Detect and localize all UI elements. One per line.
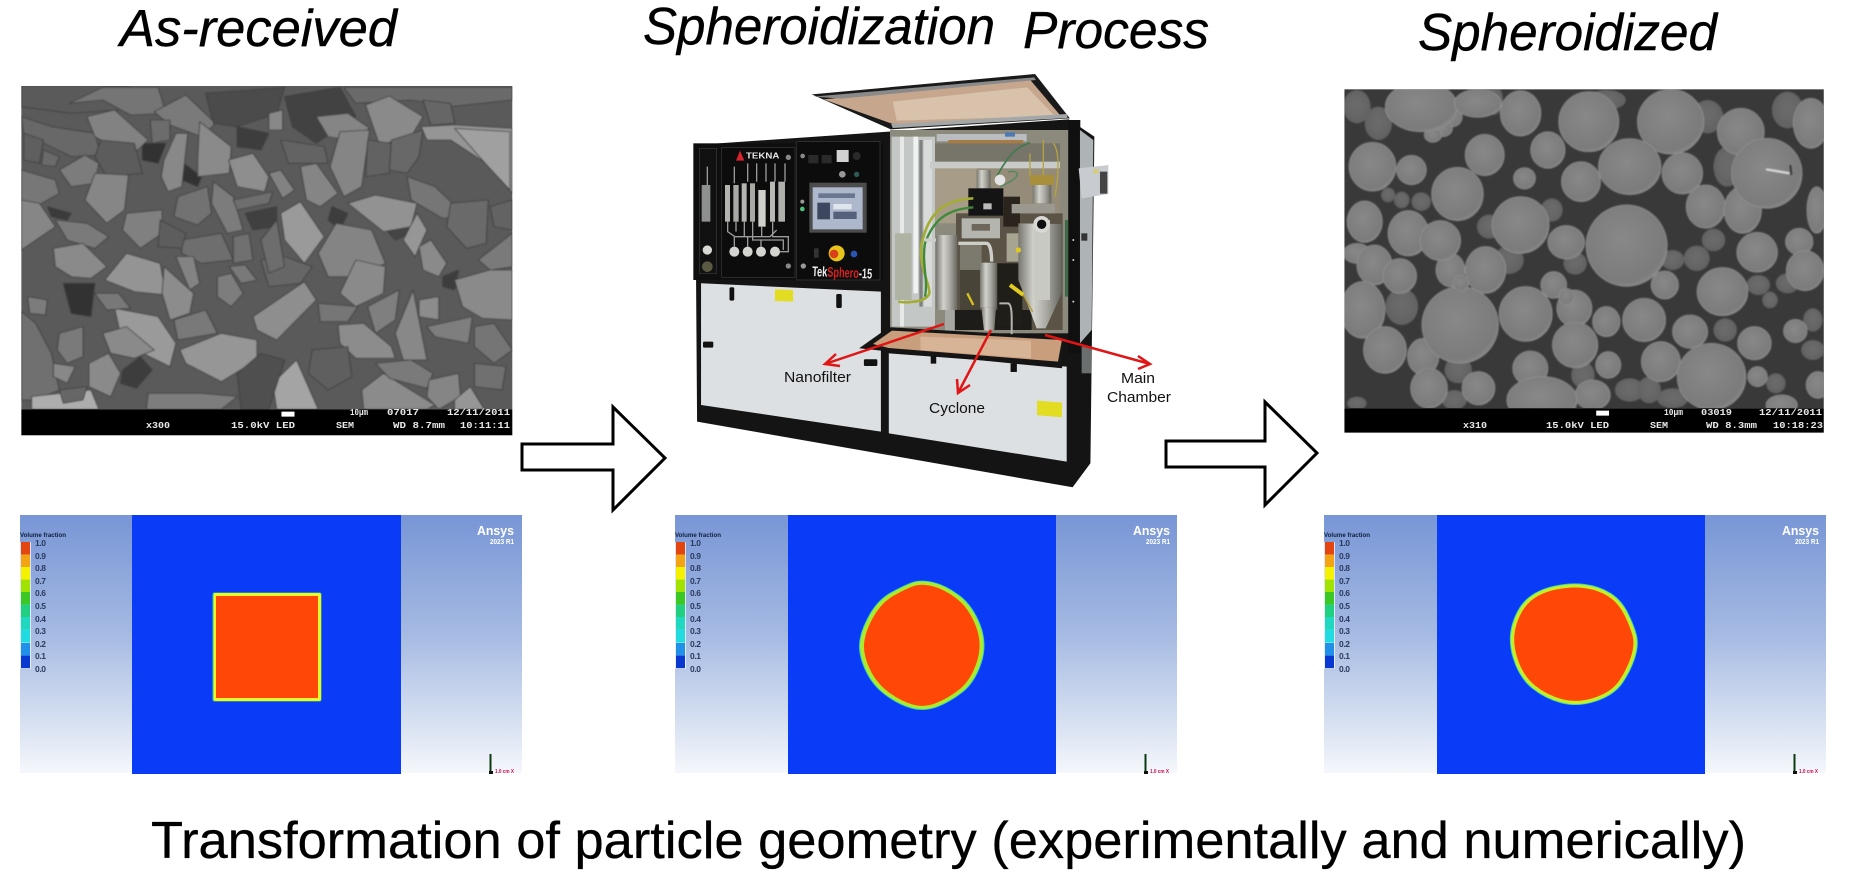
label: Main Chamber: Main [1121, 370, 1155, 387]
panel: as-received SEM micrograph: 10:11:11 [460, 421, 511, 431]
panel: spheroidized SEM micrograph: 10μm [1664, 408, 1684, 418]
heading: Spheroidization Process: Process [1023, 2, 1209, 60]
machine model name: TekSphero-15 [812, 263, 873, 282]
blue domain [1437, 515, 1705, 774]
colour legend: 0.9 [1339, 551, 1350, 561]
colour legend: 0.7 [1339, 576, 1350, 586]
lower left white panel [701, 283, 881, 432]
particle: irregular round [862, 583, 982, 707]
lower right white panel [889, 353, 1067, 462]
panel: as-received SEM micrograph [21, 86, 512, 435]
colour legend: 0.6 [690, 588, 701, 598]
axis triad: 1.0 cm X [495, 769, 515, 775]
blue domain [132, 515, 401, 774]
panel: as-received SEM micrograph: 12/11/2011 [447, 408, 511, 418]
arrow: process to spheroidized [1166, 402, 1317, 505]
panel: spheroidized SEM micrograph: SEM [1650, 421, 1668, 431]
red arrow to cyclone [957, 330, 991, 393]
colour legend: 0.9 [35, 551, 46, 561]
colour legend: 0.1 [690, 651, 701, 661]
heading: Spheroidized: Spheroidized [1418, 4, 1719, 62]
colour legend: 0.8 [35, 563, 46, 573]
colour legend: 0.6 [35, 588, 46, 598]
colour legend: 0.8 [1339, 563, 1350, 573]
label: Cyclone: Cyclone [929, 400, 985, 417]
software logo: Ansys [1782, 523, 1819, 538]
panel: CFD simulation, spheroidized particle [1324, 515, 1826, 775]
copper door shelf [859, 327, 1067, 368]
colour legend: Volume fraction [1324, 533, 1370, 539]
software logo: 2023 R1 [1146, 539, 1170, 546]
colour legend: 0.3 [1339, 626, 1350, 636]
software logo [1133, 523, 1170, 546]
simulation background [675, 515, 1177, 773]
panel: spheroidized SEM micrograph: WD 8.3mm [1706, 421, 1758, 431]
axis triad [1144, 754, 1170, 775]
panel: spheroidized SEM micrograph [1341, 82, 1830, 433]
particle: near circular [1512, 586, 1635, 703]
panel: spheroidized SEM micrograph: 12/11/2011 [1759, 408, 1823, 418]
panel: as-received SEM micrograph: 07017 [387, 408, 419, 418]
colour legend: 1.0 [35, 538, 46, 548]
machine lid [812, 74, 1070, 129]
panel: spheroidized SEM micrograph: 10:18:23 [1773, 421, 1823, 431]
colour legend: 0.3 [35, 626, 46, 636]
panel: TekSphero-15 machine photograph [693, 74, 1171, 487]
machine body [695, 119, 1094, 487]
heading: As-received: As-received [117, 0, 399, 58]
panel: as-received SEM micrograph: WD 8.7mm [393, 421, 446, 431]
colour legend: 1.0 [690, 538, 701, 548]
label: Main Chamber: Chamber [1107, 389, 1171, 406]
colour legend: 0.2 [35, 639, 46, 649]
panel: as-received SEM micrograph: SEM [336, 421, 354, 431]
panel: as-received SEM micrograph: 10μm [350, 408, 368, 418]
colour legend: 0.0 [1339, 664, 1350, 674]
colour legend: 0.9 [690, 551, 701, 561]
control panels: TEKNA [746, 150, 779, 160]
colour legend: 0.7 [35, 576, 46, 586]
software logo: 2023 R1 [1795, 539, 1819, 546]
colour legend: 0.5 [1339, 601, 1350, 611]
colour legend: 0.2 [1339, 639, 1350, 649]
colour legend [675, 533, 721, 674]
colour legend: 0.1 [1339, 651, 1350, 661]
arrow: as-received to process [522, 407, 665, 510]
colour legend [20, 533, 66, 674]
caption: Transformation of particle geometry (experimentally and numerically) [151, 812, 1746, 870]
axis triad: 1.0 cm X [1150, 769, 1170, 775]
simulation background [20, 515, 522, 773]
colour legend: 0.0 [690, 664, 701, 674]
colour legend: 0.4 [35, 614, 46, 624]
colour legend: Volume fraction [675, 533, 721, 539]
colour legend: 0.8 [690, 563, 701, 573]
panel: CFD simulation, square particle [20, 515, 522, 775]
colour legend: 0.1 [35, 651, 46, 661]
panel: as-received SEM micrograph: x300 [146, 421, 170, 431]
simulation background [1324, 515, 1826, 773]
axis triad [1793, 754, 1819, 775]
colour legend: 0.7 [690, 576, 701, 586]
colour legend: 0.4 [690, 614, 701, 624]
machine interior [890, 120, 1108, 373]
particle: square [212, 592, 322, 702]
colour legend: 0.3 [690, 626, 701, 636]
label: Main Chamber [1107, 370, 1171, 406]
axis triad [489, 754, 515, 775]
colour legend: 0.2 [690, 639, 701, 649]
blue domain [788, 515, 1056, 774]
panel: as-received SEM micrograph: 15.0kV LED [231, 421, 296, 431]
control panels [693, 142, 883, 280]
colour legend: 1.0 [1339, 538, 1350, 548]
axis triad: 1.0 cm X [1799, 769, 1819, 775]
label: Nanofilter: Nanofilter [784, 369, 851, 386]
colour legend: 0.5 [35, 601, 46, 611]
software logo [1782, 523, 1819, 546]
software logo: 2023 R1 [490, 539, 514, 546]
panel: spheroidized SEM micrograph: x310 [1463, 421, 1487, 431]
colour legend [1324, 533, 1370, 674]
colour legend: 0.6 [1339, 588, 1350, 598]
red arrow to nanofilter [825, 324, 944, 366]
software logo [477, 523, 514, 546]
colour legend: Volume fraction [20, 533, 66, 539]
red arrow to main chamber [1045, 335, 1150, 369]
software logo: Ansys [1133, 523, 1170, 538]
panel: CFD simulation, rounding particle [675, 515, 1177, 775]
panel: spheroidized SEM micrograph: 03019 [1701, 408, 1732, 418]
colour legend: 0.0 [35, 664, 46, 674]
colour legend: 0.4 [1339, 614, 1350, 624]
heading: Spheroidization Process [643, 0, 1209, 60]
colour legend: 0.5 [690, 601, 701, 611]
panel: spheroidized SEM micrograph: 15.0kV LED [1546, 421, 1610, 431]
software logo: Ansys [477, 523, 514, 538]
